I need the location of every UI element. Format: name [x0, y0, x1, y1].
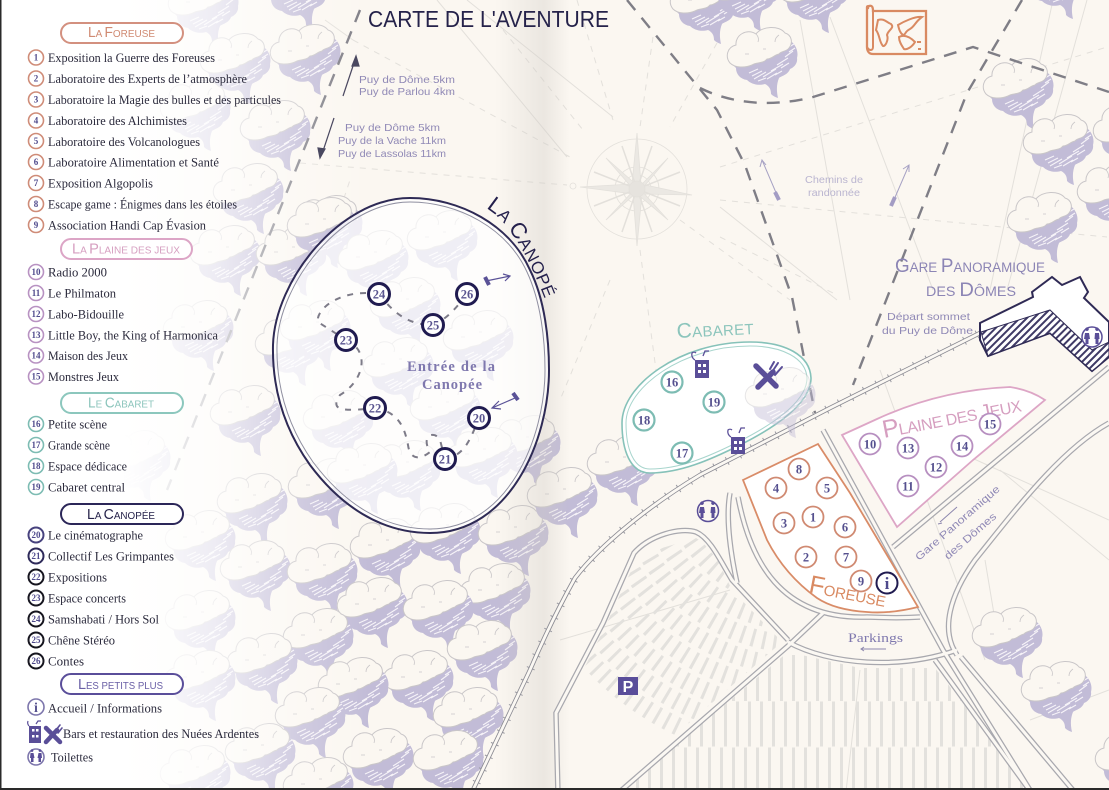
list: La Canopée: Le cinématographe: [48, 528, 143, 542]
list: La Canopée: Samshabati / Hors Sol: [48, 612, 160, 626]
panel: Foreuse zone: 2: [803, 550, 809, 564]
list: Le Cabaret: Cabaret central: [48, 480, 126, 494]
list: La Foreuse: 8: [34, 199, 39, 209]
list: La Foreuse: 4: [34, 116, 39, 126]
heading: Le Cabaret: [61, 393, 183, 413]
legend panel: [28, 23, 281, 765]
markers 20 to 26: [336, 284, 490, 470]
parking field hatching: [586, 538, 1023, 788]
heading: Plaine des Jeux: PLAINE DES JEUX: [880, 389, 1024, 444]
panel: Plaine des Jeux zone: 10: [864, 438, 876, 452]
list: La Foreuse: Association Handi Cap Évasion: [48, 218, 207, 232]
heading: La Plaine des jeux: LA PLAINE DES JEUX: [72, 242, 180, 258]
icon: toilets: [28, 749, 44, 765]
list: La Canopée: Contes: [48, 654, 84, 668]
panel: Cabaret zone: 17: [676, 446, 688, 460]
panel: Foreuse zone: 7: [843, 550, 849, 564]
panel: Plaine des Jeux zone: 12: [930, 460, 942, 474]
list: La Foreuse: Laboratoire des Alchimistes: [48, 114, 187, 128]
heading: La Plaine des jeux: [61, 239, 192, 259]
panel: Foreuse zone: [743, 444, 918, 613]
trail: [318, 293, 479, 459]
icon: parking: P: [623, 679, 634, 696]
central fold shadow: [495, 0, 570, 790]
text: Départ sommet du Puy de Dôme: Départ sommet: [887, 311, 970, 323]
panel: La Canopée zone: 21: [439, 452, 451, 466]
icon: drink: [692, 351, 709, 378]
arrow: hiking left: [760, 160, 779, 200]
list: La Canopée: Chêne Stéréo: [48, 634, 115, 648]
list: La Plaine des jeux: 13: [32, 330, 41, 340]
list: La Plaine des jeux: Little Boy, the King of Harmonica: [48, 328, 218, 342]
panel: Plaine des Jeux zone: 13: [902, 442, 914, 456]
arrow: hiking right: [891, 165, 909, 206]
list: La Foreuse: 5: [34, 136, 39, 146]
panel: Foreuse zone: 1: [810, 510, 816, 524]
icon: drink: [728, 428, 745, 454]
list: La Foreuse: 3: [34, 94, 39, 104]
text: Gare Panoramique des Dômes: DES DÔMES: [926, 280, 1016, 301]
text: Départ sommet du Puy de Dôme: [882, 311, 973, 337]
panel: La Canopée zone: 26: [461, 288, 473, 302]
list: La Plaine des jeux: 12: [32, 309, 41, 319]
list: La Foreuse: Exposition la Guerre des Foreuses: [48, 51, 215, 65]
heading: Les petits plus: LES PETITS PLUS: [78, 676, 163, 693]
list: Le Cabaret: 17: [32, 440, 41, 450]
list: Le Cabaret: 19: [32, 482, 41, 492]
list: La Foreuse: Laboratoire Alimentation et Santé: [48, 156, 219, 170]
list: Le Cabaret: 16: [32, 419, 41, 429]
panel: Foreuse zone: 8: [796, 462, 802, 476]
panel: Foreuse zone: 3: [781, 516, 787, 530]
text: Entrée de la Canopée: Canopée: [422, 377, 483, 393]
text: Parkings: Parkings: [848, 630, 903, 645]
title: CARTE DE L'AVENTURE: [368, 6, 609, 32]
panel: Foreuse zone: 6: [842, 520, 848, 534]
panel: La Canopée zone: [272, 196, 558, 534]
text: Chemins de randonnée: Chemins de: [805, 174, 863, 186]
icon: toilets: [698, 500, 718, 522]
text: Chemins de randonnée: randonnée: [808, 187, 860, 199]
list: La Canopée: 23: [32, 593, 41, 603]
dashed hiking paths: [167, 0, 1109, 490]
panel: Cabaret zone: 16: [666, 376, 678, 390]
list: Les petits plus: [28, 699, 259, 765]
list: La Foreuse: 6: [34, 157, 39, 167]
text: signpost north: [359, 74, 455, 98]
list: La Plaine des jeux: [28, 264, 218, 384]
list: La Plaine des jeux: Radio 2000: [48, 266, 107, 280]
panel: La Canopée zone: 20: [473, 412, 485, 426]
text: signpost north: Puy de Parlou 4km: [359, 86, 455, 98]
panel: Foreuse zone: 9: [858, 574, 864, 588]
list: La Canopée: 26: [32, 656, 41, 666]
icon: toilets: [1082, 327, 1102, 347]
panel: Foreuse zone: 4: [773, 482, 780, 496]
text: rotated Gare Panoramique des Dômes: Gare Panoramique: [913, 483, 1003, 563]
text: signpost south: Puy de Lassolas 11km: [338, 148, 446, 160]
heading: Foreuse: FOREUSE: [807, 570, 889, 613]
heading: Les petits plus: [61, 674, 183, 694]
arrow: toward gare: [938, 507, 957, 524]
markers 1 to 9: [766, 458, 872, 592]
list: La Canopée: 25: [32, 635, 41, 645]
list: La Foreuse: Exposition Algopolis: [48, 176, 153, 190]
list: La Canopée: 24: [32, 614, 41, 624]
list: Le Cabaret: Espace dédicace: [48, 460, 127, 474]
icon: information: [28, 699, 44, 716]
cog railway: [473, 328, 990, 790]
panel: Plaine des Jeux zone: 14: [956, 440, 969, 454]
panel: La Canopée zone: 25: [427, 318, 439, 332]
heading: La Canopée: LA CANOPÉE: [87, 506, 155, 523]
panel: Cabaret zone: [622, 316, 816, 473]
list: La Plaine des jeux: Maison des Jeux: [48, 349, 129, 363]
list: La Canopée: Collectif Les Grimpantes: [48, 550, 174, 564]
direction arrows: [318, 56, 359, 158]
list: La Plaine des jeux: 14: [32, 350, 41, 360]
text: signpost south: Puy de la Vache 11km: [338, 135, 446, 147]
text: signpost north: Puy de Dôme 5km: [359, 74, 455, 86]
list: La Canopée: 20: [32, 530, 41, 540]
panel: Cabaret zone: 18: [638, 414, 650, 428]
panel: Foreuse zone: 5: [824, 482, 830, 496]
list: La Plaine des jeux: 15: [32, 372, 41, 382]
text: Parkings: [848, 630, 903, 651]
list: La Foreuse: Laboratoire des Volcanologues: [48, 135, 200, 149]
panel: Plaine des Jeux zone: 11: [902, 480, 914, 494]
heading: Le Cabaret: LE CABARET: [88, 396, 155, 412]
roads: [556, 367, 1109, 790]
text: Chemins de randonnée: [805, 174, 863, 199]
thin web lines: [300, 0, 1109, 790]
list: La Foreuse: 9: [34, 220, 39, 230]
list: Les petits plus: Bars et restauration des Nuées Ardentes: [63, 727, 259, 741]
list: La Foreuse: [28, 50, 281, 232]
list: La Foreuse: Escape game : Énigmes dans les étoiles: [48, 198, 237, 212]
list: La Canopée: Expositions: [48, 570, 107, 584]
text: signpost south: [338, 122, 446, 160]
markers 16 to 19: [634, 372, 724, 464]
list: La Canopée: 21: [32, 551, 41, 561]
gare building: [980, 277, 1109, 371]
icon: information: i: [885, 574, 890, 593]
panel: Plaine des Jeux zone: 15: [984, 418, 996, 432]
icon: cutlery: [756, 362, 782, 387]
panel: La Canopée zone: 24: [373, 288, 386, 302]
icon: compass rose: [570, 133, 692, 246]
markers 10 to 15: [860, 414, 1000, 496]
icon: information: i: [34, 701, 38, 716]
list: La Plaine des jeux: 10: [32, 267, 41, 277]
heading: La Foreuse: [61, 23, 183, 43]
left page fade: [0, 0, 370, 790]
text: Départ sommet du Puy de Dôme: du Puy de Dôme: [882, 325, 973, 337]
list: Le Cabaret: [28, 416, 127, 494]
icon: cutlery: [46, 725, 62, 742]
panel: La Canopée zone: 22: [369, 402, 381, 416]
list: La Canopée: Espace concerts: [48, 592, 126, 606]
list: La Plaine des jeux: Labo-Bidouille: [48, 308, 124, 322]
text: Entrée de la Canopée: Entrée de la: [407, 359, 496, 375]
list: La Foreuse: Laboratoire la Magie des bulles et des particules: [48, 93, 281, 107]
list: La Foreuse: Laboratoire des Experts de l’atmosphère: [48, 72, 247, 86]
icon: parking: [618, 677, 638, 696]
list: La Foreuse: 1: [34, 52, 39, 62]
list: La Plaine des jeux: Monstres Jeux: [48, 370, 120, 384]
panel: La Canopée zone: 23: [340, 334, 352, 348]
list: Les petits plus: Toilettes: [51, 750, 93, 764]
icon: map: [867, 6, 926, 54]
panel: Cabaret zone: 19: [708, 396, 720, 410]
list: La Foreuse: 2: [34, 74, 39, 84]
text: rotated Gare Panoramique des Dômes: des Dômes: [942, 511, 999, 562]
list: La Foreuse: 7: [34, 178, 39, 188]
text: signpost south: Puy de Dôme 5km: [345, 122, 440, 134]
list: Le Cabaret: 18: [32, 461, 41, 471]
icon: information: [876, 572, 898, 594]
text: Gare Panoramique des Dômes: [895, 256, 1045, 301]
list: La Plaine des jeux: 11: [32, 288, 41, 298]
icon: drink: [28, 721, 41, 743]
heading: Cabaret: CABARET: [676, 316, 754, 343]
list: Les petits plus: Accueil / Informations: [48, 702, 162, 716]
list: La Plaine des jeux: Le Philmaton: [48, 286, 117, 300]
heading: La Foreuse: LA FOREUSE: [88, 25, 155, 41]
list: Le Cabaret: Petite scène: [48, 418, 107, 432]
arrows: [485, 274, 518, 409]
list: La Canopée: 22: [32, 572, 41, 582]
panel: Plaine des Jeux zone: [842, 387, 1045, 527]
text: Gare Panoramique des Dômes: GARE PANORAMIQUE: [895, 256, 1045, 277]
list: La Canopée: [28, 528, 174, 668]
list: Le Cabaret: Grande scène: [48, 438, 110, 452]
heading: La Canopée: [61, 504, 183, 524]
